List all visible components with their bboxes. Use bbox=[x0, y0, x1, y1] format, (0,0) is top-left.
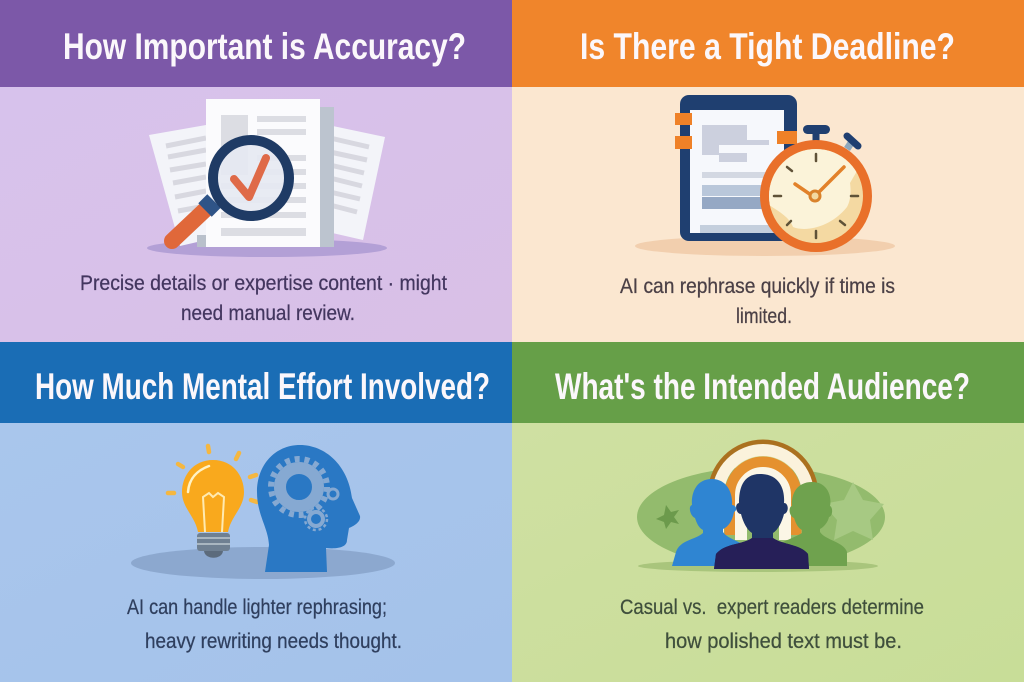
text: accuracy: need manual review. bbox=[181, 301, 355, 325]
head with gears bbox=[257, 445, 360, 572]
heading: mental effort: How Much Mental Effort Involved? bbox=[35, 366, 490, 407]
text: deadline bbox=[620, 274, 895, 328]
text: deadline: limited. bbox=[736, 304, 792, 328]
header: accuracy bbox=[0, 0, 512, 87]
person: right bbox=[770, 482, 847, 566]
icon: lightbulb and head bbox=[131, 445, 395, 579]
text: mental effort bbox=[127, 595, 402, 653]
text: audience: how polished text must be. bbox=[665, 629, 902, 653]
magnifier bbox=[172, 140, 289, 241]
person: left bbox=[672, 479, 750, 566]
heading: accuracy: How Important is Accuracy? bbox=[63, 26, 466, 67]
stopwatch bbox=[755, 125, 875, 248]
icon: notebook and stopwatch bbox=[635, 95, 895, 256]
header: audience bbox=[512, 342, 1024, 423]
rainbow bbox=[710, 442, 816, 540]
person: center bbox=[714, 474, 809, 569]
text: mental effort: AI can handle lighter rephrasing; bbox=[127, 595, 387, 619]
text: accuracy bbox=[80, 271, 447, 325]
header: deadline bbox=[512, 0, 1024, 87]
panel: audience bbox=[512, 342, 1024, 682]
panel: mental effort bbox=[0, 342, 512, 682]
lightbulb bbox=[168, 446, 257, 558]
text: deadline: AI can rephrase quickly if time is bbox=[620, 274, 895, 298]
header: mental effort bbox=[0, 342, 512, 423]
icon: audience group bbox=[637, 442, 885, 572]
panel: deadline bbox=[512, 0, 1024, 342]
text: audience: Casual vs. expert readers determine bbox=[620, 595, 924, 619]
text: mental effort: heavy rewriting needs thought. bbox=[145, 629, 402, 653]
panel: accuracy bbox=[0, 0, 512, 342]
text: accuracy: Precise details or expertise content · might bbox=[80, 271, 447, 295]
icon: documents and magnifier bbox=[147, 99, 387, 257]
text: audience bbox=[620, 595, 924, 653]
